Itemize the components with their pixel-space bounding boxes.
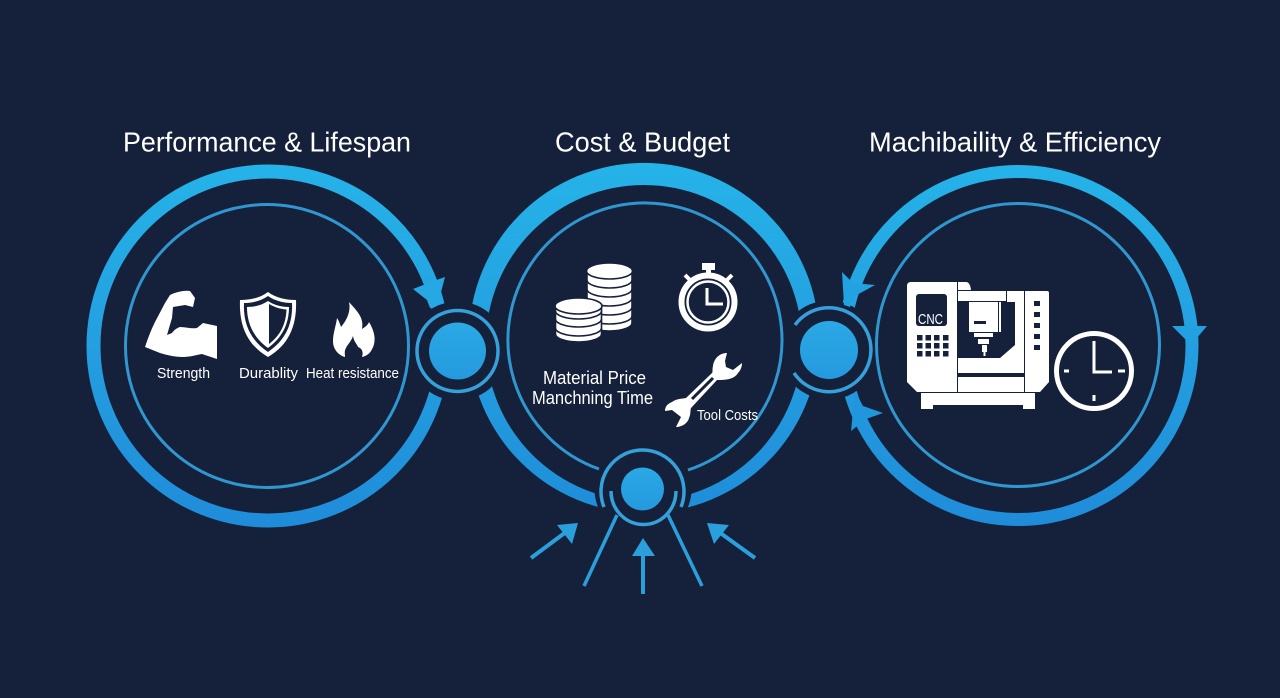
icon: shield (240, 292, 296, 357)
keypad (917, 335, 948, 356)
outer ring: machinability (844, 172, 1192, 520)
label: Manchning Time: Manchning Time (532, 388, 653, 408)
connector node: bottom (594, 440, 692, 538)
inner ring: cost (508, 203, 782, 470)
title: Cost & Budget: Cost & Budget (555, 126, 730, 158)
spindle (969, 302, 1001, 356)
icon: wrench (665, 353, 742, 427)
icon: flame (333, 302, 375, 357)
arrowhead: machinability ring bottom (851, 391, 883, 431)
icon: coin stacks (555, 263, 632, 342)
arrow: lower right (707, 523, 755, 558)
icon: stopwatch (682, 263, 734, 328)
title: Performance & Lifespan: Performance & Lifespan (123, 126, 411, 158)
arrowhead: performance ring (413, 277, 445, 308)
inner ring: performance (126, 204, 408, 488)
label: Strength: Strength (157, 366, 210, 382)
outer ring: performance (94, 172, 442, 520)
title: Machibaility & Efficiency: Machibaility & Efficiency (869, 126, 1161, 158)
label: Material Price: Material Price (543, 368, 646, 388)
connector node: left (408, 302, 507, 400)
indicator lights (1034, 301, 1040, 350)
label: Tool Costs: Tool Costs (697, 407, 758, 424)
icon: clock (1056, 334, 1132, 408)
arrowhead: machinability ring right (1172, 326, 1207, 345)
fan lines below bottom node (584, 515, 702, 586)
label: Heat resistance: Heat resistance (306, 366, 399, 382)
arrow: lower left (531, 523, 578, 558)
outer ring: cost (469, 163, 819, 513)
icon: flexed arm (145, 291, 217, 359)
label: Durablity: Durablity (239, 366, 299, 382)
connector node: right (780, 300, 878, 400)
arrow: centre up (632, 538, 655, 594)
arrowhead: machinability ring top (842, 272, 875, 307)
text: CNC: CNC (918, 312, 943, 328)
inner ring: machinability (876, 204, 1160, 486)
icon: CNC machine (907, 282, 1049, 409)
